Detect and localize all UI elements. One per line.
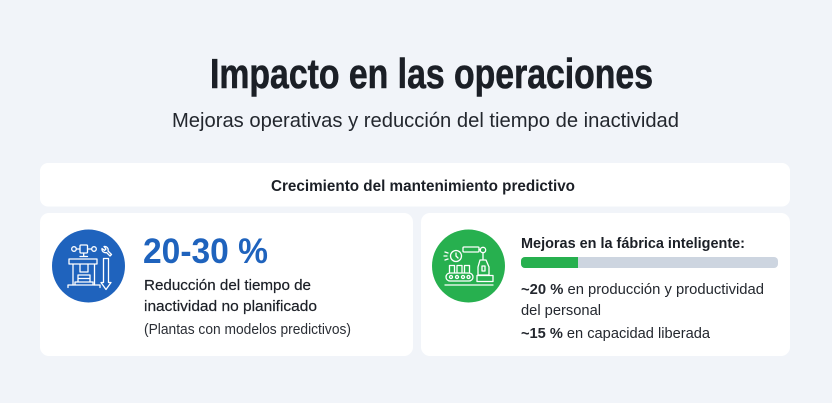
improvements heading: Mejoras en la fábrica inteligente: [521,236,745,252]
stat note: (Plantas con modelos predictivos) [144,322,351,338]
improvements list: ~15 % en capacidad liberada [521,326,711,342]
stat description: inactividad no planificado [144,299,317,315]
panel: header bar [40,163,790,206]
progress bar [521,257,778,268]
subtitle: Mejoras operativas y reducción del tiempo de inactividad [172,109,679,132]
panel: downtime reduction [40,213,413,356]
title: Impacto en las operaciones [210,50,653,97]
improvements list [521,282,764,342]
icon: factory robot arm [432,230,505,302]
improvements list: del personal [521,303,601,319]
stat description: Reducción del tiempo de [144,278,311,294]
icon: hydraulic press [52,230,125,302]
header bar heading: Crecimiento del mantenimiento predictivo [271,178,575,195]
panel: smart factory improvements [421,213,790,356]
stat: 20-30 %: 20-30 % [143,232,268,271]
improvements list: ~20 % en producción y productividad [521,282,764,298]
